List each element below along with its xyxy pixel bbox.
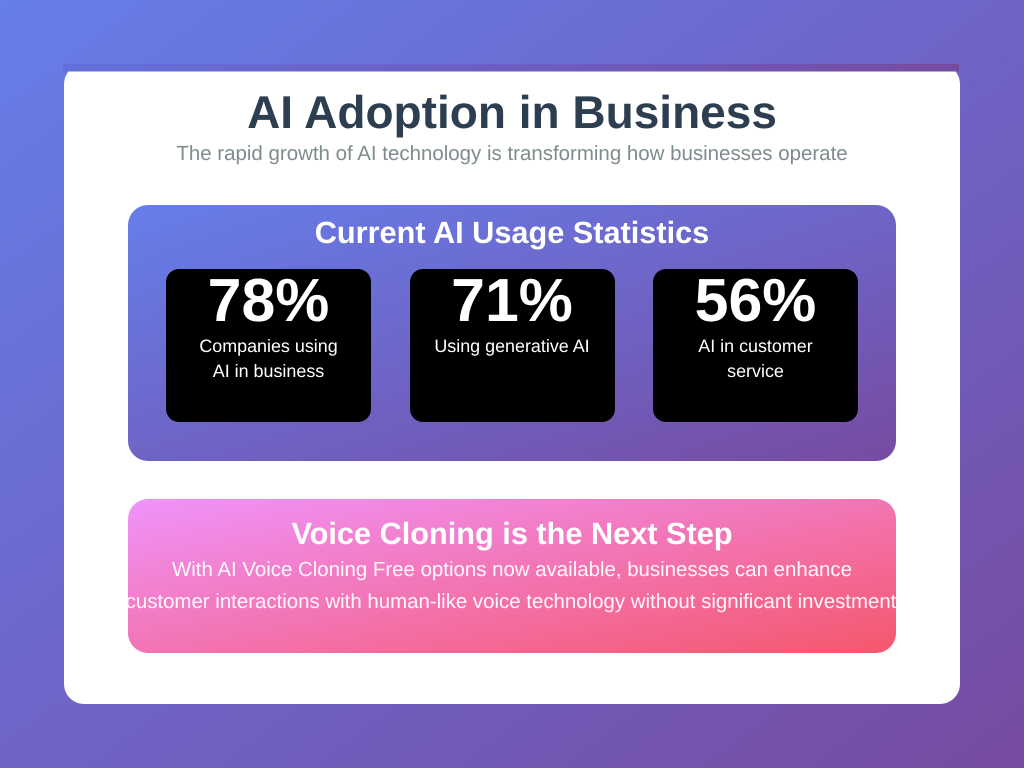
stat card: 56% xyxy=(653,266,858,422)
stat value: 56%: 56% xyxy=(695,266,816,334)
subtitle: The rapid growth of AI technology is transforming how businesses operate xyxy=(176,142,848,165)
callout text: customer interactions with human-like voice technology without significant investment xyxy=(126,591,897,613)
stat label: AI in customer service: service xyxy=(727,361,784,381)
callout text: With AI Voice Cloning Free options now available, businesses can enhance xyxy=(172,559,852,581)
stat label: AI in customer service xyxy=(698,336,813,381)
callout heading: Voice Cloning is the Next Step xyxy=(291,516,733,551)
panel background xyxy=(128,205,896,461)
stat label: AI in customer service: AI in customer xyxy=(698,336,813,356)
stat value: 78%: 78% xyxy=(208,266,329,334)
panel heading: Current AI Usage Statistics xyxy=(315,215,709,250)
stat card: 78% xyxy=(166,266,371,422)
panel: main white card xyxy=(64,64,960,704)
top accent bar xyxy=(63,64,959,72)
panel: voice cloning callout xyxy=(126,499,897,653)
stat label: using generative AI: Using generative AI xyxy=(434,336,590,356)
stat label: companies using AI xyxy=(199,336,338,381)
title: AI Adoption in Business xyxy=(247,86,777,138)
panel: current AI usage statistics xyxy=(128,205,896,461)
stat value: 71%: 71% xyxy=(451,266,573,334)
stat label: companies using AI: AI in business xyxy=(213,361,324,381)
callout text xyxy=(126,559,897,613)
callout background xyxy=(128,499,896,653)
stat label: companies using AI: Companies using xyxy=(199,336,338,356)
stat card: 71% xyxy=(410,266,615,422)
